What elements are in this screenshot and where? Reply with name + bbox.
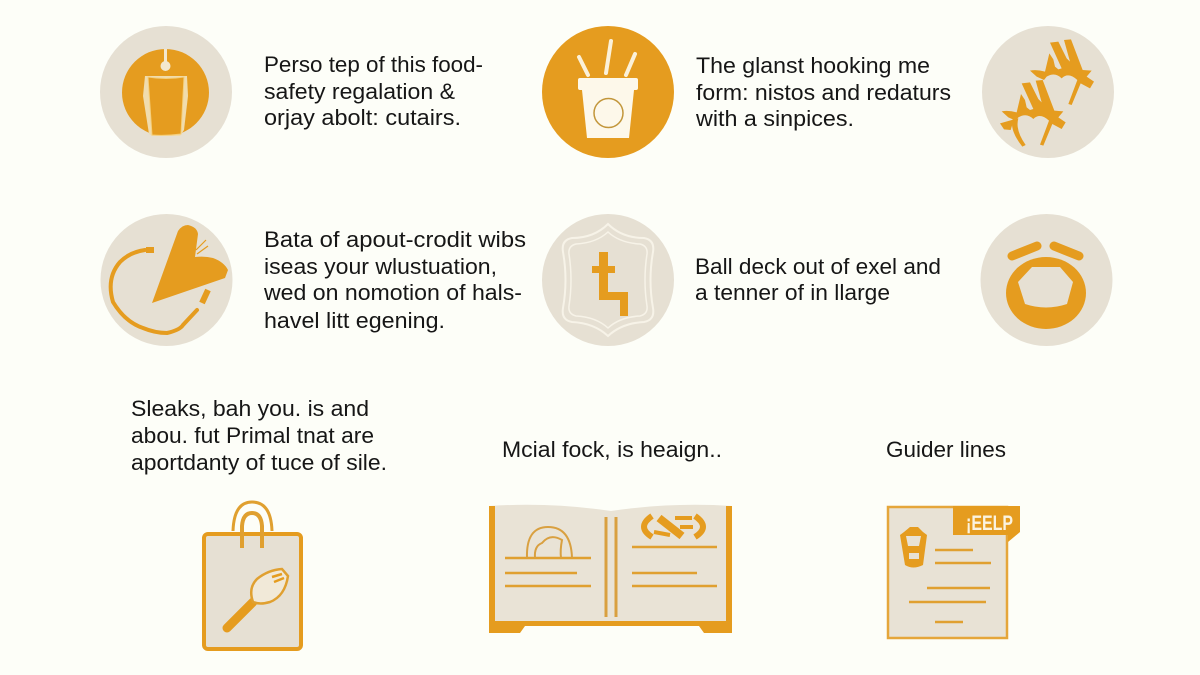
text block: top left: Perso tep of this food- [264,52,483,77]
text block: middle left: havel litt egening. [264,308,445,333]
text block: bottom left: abou. fut Primal tnat are [131,423,374,448]
text: guidelines caption: Guider lines [886,437,1006,462]
text block: top right: form: nistos and redaturs [696,80,951,105]
label text: ¡EELP [966,512,1013,535]
text block: top left: orjay abolt: cutairs. [264,105,461,130]
text block: top right: with a sinpices. [695,106,854,131]
text block: middle right: a tenner of in llarge [695,280,890,305]
text block: top right [695,53,951,131]
icon: document with label [888,506,1020,638]
text block: top right: The glanst hooking me [696,53,930,78]
text block: middle left: wed on nomotion of hals- [263,280,522,305]
text: book caption: Mcial fock, is heaign.. [502,437,722,462]
text block: middle left [263,227,526,333]
text block: bottom left [131,396,387,475]
icon: badge with t symbol in circle [542,214,674,346]
icon: heart and cable in circle [100,214,232,346]
text block: bottom left: Sleaks, bah you. is and [131,396,369,421]
text block: middle left: Bata of apout-crodit wibs [264,227,526,252]
icon: candle cup in circle [100,26,232,158]
text block: middle right: Ball deck out of exel and [695,254,941,279]
icon: alarm clock ring in circle [980,214,1112,346]
icon: shopping bag with spoon [204,502,301,649]
icon: cup with sticks in circle [542,26,674,158]
text block: top left [264,52,483,130]
text block: middle right [695,254,941,305]
text block: middle left: iseas your wlustuation, [264,254,497,279]
text block: top left: safety regalation & [264,79,455,104]
text block: bottom left: aportdanty of tuce of sile. [131,450,387,475]
icon: open book [489,505,732,633]
icon: antlers in circle [982,26,1114,158]
